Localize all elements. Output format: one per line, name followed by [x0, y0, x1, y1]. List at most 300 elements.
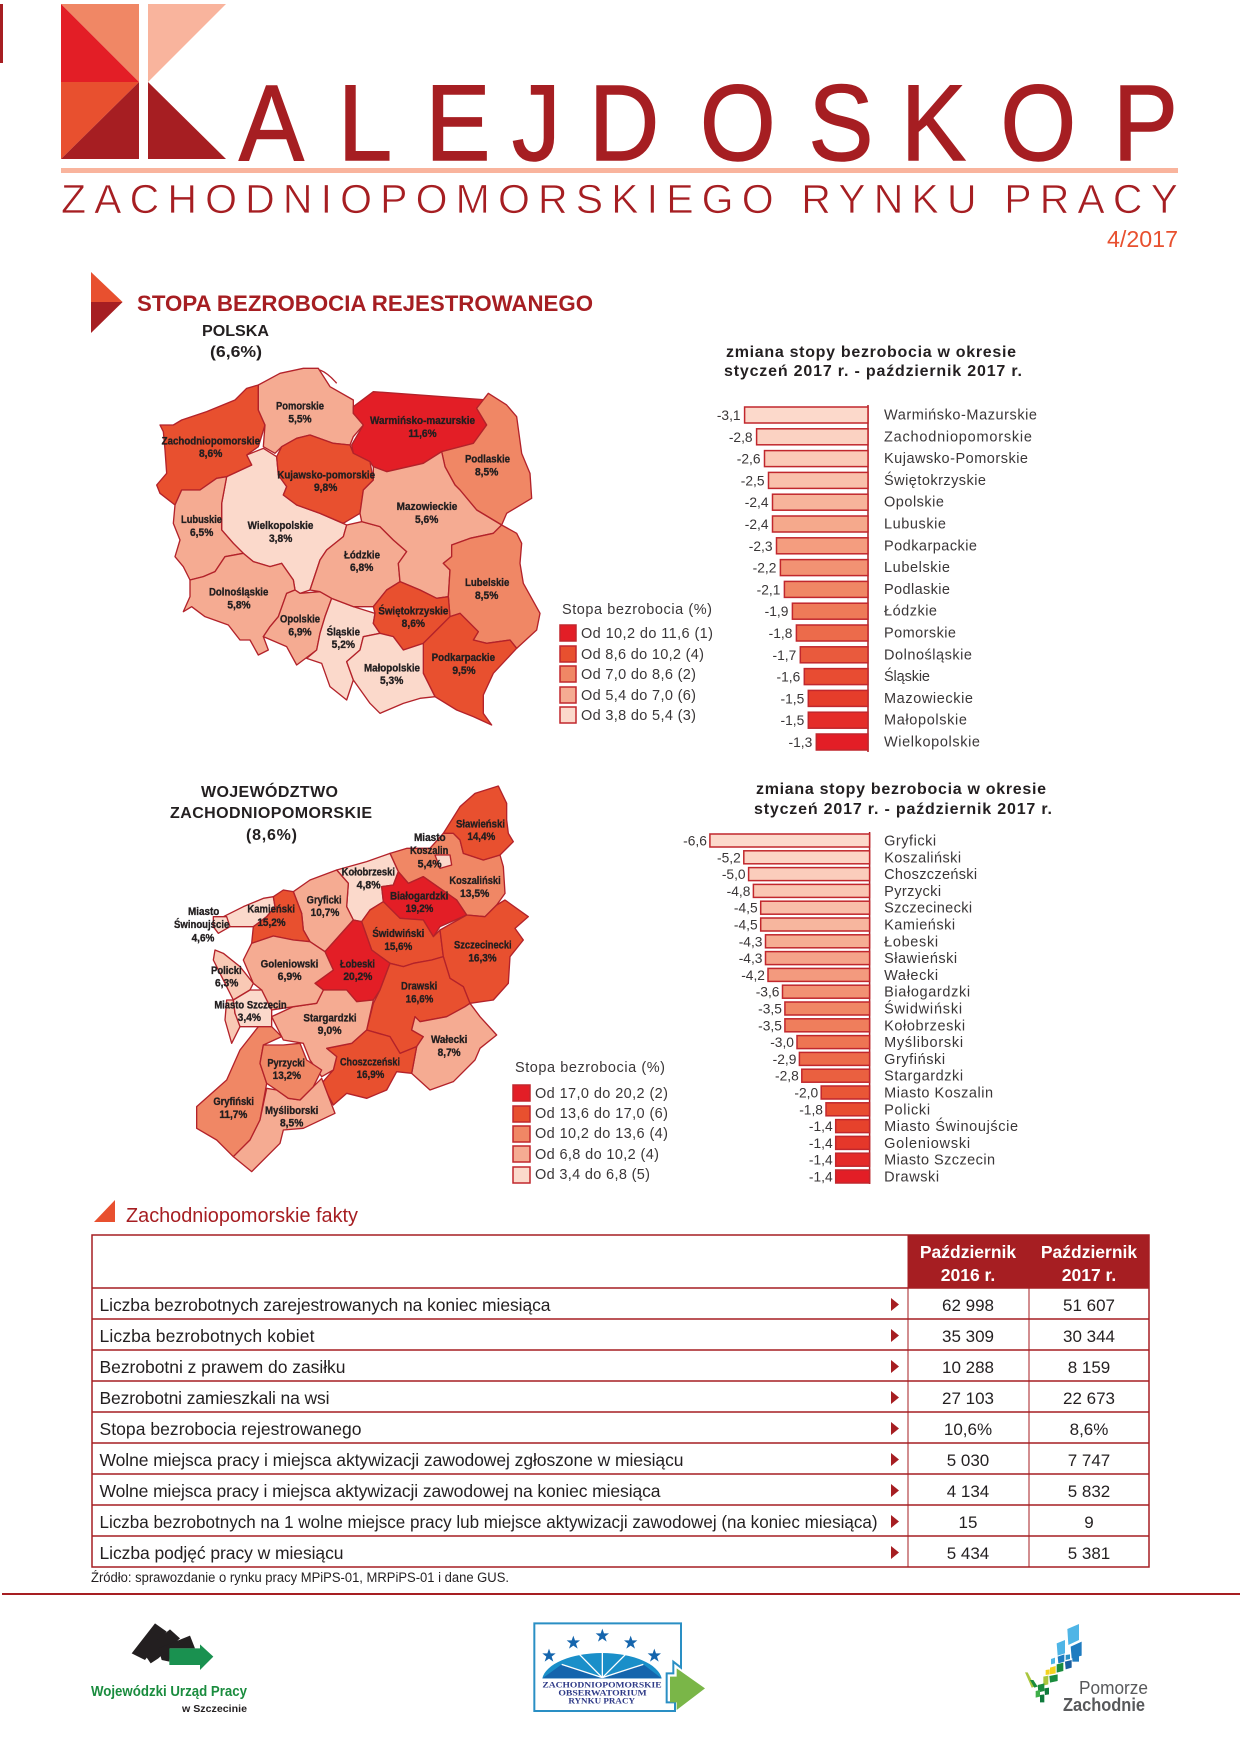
map labels: Miasto — [414, 832, 446, 844]
row: Pomorskie: Pomorskie — [884, 626, 956, 642]
region: Pomorskie — [258, 368, 363, 453]
region: Swietokrzyskie — [373, 582, 450, 650]
map labels: Opolskie — [280, 613, 320, 625]
row: Gryficki: -6,6 — [683, 834, 707, 848]
map labels: Kamieński — [247, 903, 295, 915]
map labels: 11,6% — [408, 428, 437, 440]
map labels: 13,5% — [460, 888, 490, 900]
row: Drawski: -1,4 — [809, 1170, 833, 1184]
logo box — [534, 1623, 681, 1711]
row: Kujawsko-Pomorskie — [737, 451, 1028, 467]
map labels: 16,6% — [406, 993, 434, 1005]
map labels: Lubelskie — [465, 577, 509, 589]
row: Szczecinecki — [734, 901, 972, 917]
facts table — [92, 1235, 1149, 1567]
row: Wielkopolskie: -1,3 — [789, 735, 813, 750]
row: unemployed women: 30 344 — [1063, 1327, 1115, 1346]
row: Swidwinski: Świdwiński — [884, 1000, 962, 1018]
region: Wolin island — [223, 897, 275, 927]
region: Walecki — [412, 1003, 497, 1090]
region: Goleniowski — [243, 936, 333, 1010]
map labels: Miasto Szczecin — [214, 999, 287, 1011]
map labels: Koszalin — [410, 845, 449, 857]
table header cells: 2017 r. — [1062, 1265, 1116, 1285]
row: Walecki: Wałecki — [884, 968, 938, 984]
row: Podkarpackie: -2,3 — [749, 539, 773, 554]
logo: Zachodniopomorskie Obserwatorium Rynku Pracy — [534, 1623, 705, 1711]
map labels: 6,8% — [350, 562, 374, 574]
row: Kujawsko-Pomorskie: Kujawsko-Pomorskie — [884, 451, 1028, 467]
row: Goleniowski: Goleniowski — [884, 1136, 970, 1152]
row: Gryfinski — [773, 1052, 945, 1068]
map labels: 5,3% — [380, 675, 404, 687]
row: benefit eligible — [100, 1357, 1110, 1377]
icon: pixel mosaic tick — [1025, 1624, 1082, 1702]
region: Kamienski — [252, 890, 310, 943]
row: Podkarpackie — [749, 538, 977, 554]
row: Zachodniopomorskie: Zachodniopomorskie — [884, 429, 1032, 445]
region: Dolnoslaskie — [183, 553, 295, 655]
section heading: Stopa bezrobocia rejestrowanego — [91, 272, 593, 333]
row: Slaskie: -1,6 — [777, 670, 801, 685]
row: rural unemployed: Bezrobotni zamieszkali na wsi — [100, 1388, 330, 1408]
row: Choszczenski: -5,0 — [722, 867, 746, 882]
chart heading: Poland change: zmiana stopy bezrobocia w okresie — [726, 344, 1016, 361]
map labels: 9,8% — [314, 482, 338, 494]
map labels: Pyrzycki — [267, 1057, 305, 1069]
map labels: 9,5% — [452, 665, 476, 677]
row: Swidwinski — [758, 1000, 962, 1018]
row: unemployed per vacancy: 9 — [1084, 1513, 1094, 1532]
row: Gryfinski: Gryfiński — [884, 1052, 945, 1068]
row: registered unemployment rate: Stopa bezrobocia rejestrowanego — [100, 1419, 362, 1439]
map labels: 15,6% — [384, 941, 413, 953]
map labels: 4,6% — [192, 932, 215, 944]
map labels: Wielkopolskie — [248, 520, 313, 532]
logo: Pomorze Zachodnie: Zachodnie — [1063, 1695, 1145, 1715]
map labels: Śląskie — [327, 625, 360, 638]
row: unemployed women: Liczba bezrobotnych kobiet — [100, 1326, 315, 1346]
map labels: 3,8% — [269, 533, 293, 545]
legend: Poland unemployment rate: Od 8,6 do 10,2 (4) — [581, 647, 704, 663]
legend: county unemployment rate — [513, 1060, 668, 1183]
map labels: Stargardzki — [303, 1012, 357, 1024]
legend: Poland unemployment rate — [560, 602, 713, 724]
row: vacancies at month end: 4 134 — [947, 1482, 989, 1501]
map labels: 16,3% — [468, 952, 497, 964]
row: Kolobrzeski — [758, 1018, 965, 1034]
row: Swietokrzyskie: Świętokrzyskie — [884, 471, 986, 489]
region: Kujawsko-pomorskie — [277, 435, 373, 523]
map labels: 10,7% — [311, 907, 340, 919]
row: Dolnoslaskie — [773, 647, 972, 663]
table header cells: 2016 r. — [941, 1265, 995, 1285]
map labels: Koszaliński — [449, 875, 501, 887]
icon: kaleidoscope K logo — [61, 4, 226, 159]
row: benefit eligible: Bezrobotni z prawem do zasiłku — [100, 1357, 346, 1377]
map labels: Małopolskie — [364, 662, 420, 674]
map heading: Wojewodztwo Zachodniopomorskie — [170, 782, 372, 844]
axis — [869, 832, 871, 1184]
region: Podlaskie — [442, 393, 532, 525]
map labels: Białogardzki — [390, 890, 448, 902]
row: Mysliborski — [770, 1035, 963, 1051]
row: Mazowieckie: -1,5 — [781, 691, 805, 706]
region: Lubuskie — [173, 477, 243, 580]
region: Stargardzki — [272, 990, 373, 1077]
row: Kujawsko-Pomorskie: -2,6 — [737, 452, 761, 467]
chart heading: county change: zmiana stopy bezrobocia w okresie — [756, 781, 1046, 798]
legend: Poland unemployment rate: Od 7,0 do 8,6 (2) — [581, 667, 696, 683]
map labels: 8,5% — [280, 1118, 304, 1130]
map labels: Drawski — [401, 980, 437, 992]
row: Policki: Policki — [884, 1102, 930, 1118]
row: jobs taken: 5 434 — [947, 1544, 989, 1563]
row: Lubelskie: Lubelskie — [884, 560, 950, 576]
region: Lobeski — [315, 920, 390, 1002]
row: Malopolskie: -1,5 — [781, 713, 805, 728]
row: Mysliborski: -3,0 — [770, 1035, 794, 1050]
map labels: Myśliborski — [265, 1105, 318, 1117]
row: Wielkopolskie — [789, 734, 980, 750]
region: Policki — [213, 950, 253, 1000]
heading text: STOPA BEZROBOCIA REJESTROWANEGO — [137, 291, 593, 316]
row: Stargardzki: -2,8 — [775, 1069, 799, 1084]
row: Slaskie: Śląskie — [884, 667, 930, 685]
map labels: 9,0% — [318, 1025, 342, 1037]
logo text: RYNKU PRACY — [568, 1696, 635, 1705]
row: unemployed women: 35 309 — [942, 1327, 994, 1346]
map labels: 16,9% — [357, 1069, 385, 1081]
row: Miasto Swinoujscie: -1,4 — [809, 1119, 833, 1134]
logo text — [542, 1681, 662, 1705]
map labels: 13,2% — [273, 1070, 301, 1082]
map labels: Policki — [211, 965, 242, 977]
row: vacancies at month end: Wolne miejsca pracy i miejsca aktywizacji zawodowej na koniec miesiąca — [100, 1481, 661, 1501]
logo: Pomorze Zachodnie — [1025, 1624, 1148, 1715]
table header cells: Październik — [1041, 1242, 1137, 1262]
row: Miasto Swinoujscie: Miasto Świnoujście — [884, 1117, 1018, 1135]
map heading: Polska: (6,6%) — [210, 344, 262, 361]
map labels: 6,9% — [278, 971, 302, 983]
icon: green arrow — [670, 1668, 705, 1710]
region: Lodzkie — [310, 522, 407, 607]
region: Drawski — [367, 957, 470, 1053]
row: Bialogardzki: Białogardzki — [884, 985, 970, 1001]
row: Lubelskie — [753, 560, 950, 576]
row: Dolnoslaskie: -1,7 — [773, 648, 796, 663]
legend: county unemployment rate: Od 6,8 do 10,2 (4) — [535, 1147, 659, 1163]
row: Lubelskie: -2,2 — [753, 561, 776, 576]
row: Mazowieckie — [781, 690, 973, 707]
map labels: 8,7% — [438, 1047, 461, 1059]
icon: dome — [542, 1650, 662, 1678]
row: Warminsko-Mazurskie — [717, 407, 1037, 424]
table grid — [92, 1235, 1149, 1567]
row: Drawski: Drawski — [884, 1170, 939, 1186]
row: jobs taken — [100, 1543, 1110, 1563]
region: Bialogardzki — [382, 872, 467, 937]
row: Pyrzycki — [727, 884, 941, 900]
map labels: 5,5% — [288, 413, 312, 425]
row: Koszalinski: Koszaliński — [884, 850, 961, 866]
map labels: 6,5% — [190, 527, 214, 539]
map labels: Warmińsko-mazurskie — [370, 415, 475, 427]
row: Goleniowski — [809, 1136, 970, 1152]
row: unemployed per vacancy: Liczba bezrobotnych na 1 wolne miejsce pracy lub miejsce aktywizacji zawodowej (na koniec miesiąca) — [100, 1512, 878, 1532]
map labels: Wałecki — [431, 1034, 467, 1046]
map labels: Szczecinecki — [454, 939, 512, 951]
region: Koszalinski — [390, 833, 505, 917]
row: Mazowieckie: Mazowieckie — [884, 691, 973, 707]
map labels: 15,2% — [257, 917, 286, 929]
region: Zachodniopomorskie — [157, 385, 265, 505]
region: Wielkopolskie — [222, 448, 347, 593]
row: jobs taken: 5 381 — [1068, 1544, 1110, 1563]
row: Stargardzki — [775, 1069, 963, 1085]
map labels: Gryfiński — [213, 1096, 254, 1108]
map labels: Sławieński — [456, 818, 505, 830]
row: Szczecinecki: Szczecinecki — [884, 901, 972, 917]
row: Lodzkie — [765, 603, 937, 620]
footer rule — [2, 1593, 1240, 1595]
legend: Poland unemployment rate: Od 10,2 do 11,6 (1) — [581, 626, 713, 642]
region: Choszczenski — [322, 1030, 417, 1105]
row: Pyrzycki: Pyrzycki — [884, 884, 941, 900]
row: Miasto Szczecin: -1,4 — [809, 1153, 833, 1168]
row: Miasto Koszalin — [794, 1086, 993, 1102]
region: Opolskie — [263, 590, 332, 665]
map regions — [197, 786, 528, 1172]
row: Swidwinski: -3,5 — [758, 1002, 782, 1016]
row: Lubuskie — [745, 516, 946, 532]
row: rural unemployed: 27 103 — [942, 1389, 994, 1408]
source note: Źródło: sprawozdanie o rynku pracy MPiPS-01, MRPiPS-01 i dane GUS. — [91, 1570, 509, 1585]
region: Kolobrzeski — [337, 853, 398, 922]
map labels: 5,6% — [415, 514, 439, 526]
map labels: Świdwiński — [372, 927, 424, 940]
map labels — [162, 400, 510, 687]
region: Miasto Szczecin — [233, 990, 272, 1027]
map labels: Choszczeński — [340, 1056, 400, 1068]
chart heading: county change — [754, 781, 1052, 818]
icon: mountains and green arrow — [132, 1623, 213, 1670]
row: Slaskie — [777, 667, 930, 685]
row: benefit eligible: 8 159 — [1068, 1358, 1110, 1377]
row: Drawski — [809, 1170, 939, 1186]
row: Slawienski — [739, 951, 957, 967]
row: Kamienski: Kamieński — [884, 918, 955, 934]
row: Choszczenski — [722, 867, 977, 883]
row: Podlaskie: -2,1 — [757, 582, 780, 597]
row: Bialogardzki — [756, 985, 970, 1001]
legend: county unemployment rate: Od 17,0 do 20,2 (2) — [535, 1086, 668, 1102]
bar chart: change in unemployment by county — [683, 832, 1018, 1186]
map labels: Łobeski — [340, 958, 375, 970]
row: vacancies at month end — [100, 1481, 1110, 1501]
map labels: 20,2% — [343, 971, 373, 983]
row: Malopolskie: Małopolskie — [884, 713, 967, 729]
chart heading: Poland change: styczeń 2017 r. - październik 2017 r. — [724, 363, 1022, 380]
map labels: 5,4% — [418, 858, 442, 870]
issue number: 4/2017 — [1107, 226, 1178, 252]
row: Policki: -1,8 — [799, 1102, 823, 1117]
row: Gryficki — [683, 834, 936, 850]
region: Malopolskie — [347, 633, 435, 713]
legend: county unemployment rate: Stopa bezrobocia (%) — [515, 1060, 665, 1076]
row: Koszalinski — [717, 850, 961, 866]
row: vacancies reported: 5 030 — [947, 1451, 989, 1470]
subtitle: ZACHODNIOPOMORSKIEGO RYNKU PRACY — [61, 176, 1178, 222]
row: Lubuskie: -2,4 — [745, 517, 769, 532]
row: Miasto Szczecin: Miasto Szczecin — [884, 1153, 995, 1169]
row: Slawienski: Sławieński — [884, 951, 957, 967]
map labels: Gryficki — [307, 894, 342, 906]
region: Mazowieckie — [360, 452, 502, 598]
facts heading text: Zachodniopomorskie fakty — [126, 1205, 358, 1227]
region: Warminsko-mazurskie — [352, 392, 488, 472]
map heading: Polska — [202, 323, 269, 361]
row: Malopolskie — [781, 712, 967, 729]
masthead: Kalejdoskop logo and title — [0, 4, 1178, 252]
map labels: Lubuskie — [181, 514, 222, 526]
legend: county unemployment rate: Od 13,6 do 17,0 (6) — [535, 1106, 668, 1122]
map: Poland voivodeships — [157, 368, 540, 725]
region: Slaskie — [307, 598, 380, 700]
legend: county unemployment rate: Od 3,4 do 6,8 (5) — [535, 1167, 650, 1183]
map labels: 6,9% — [288, 626, 312, 638]
row: Opolskie: -2,4 — [745, 495, 769, 510]
region: Slawienski — [443, 786, 513, 860]
region: Miasto Koszalin — [435, 855, 452, 868]
row: Bialogardzki: -3,6 — [756, 985, 780, 1000]
map regions — [157, 368, 540, 725]
row: Pyrzycki: -4,8 — [727, 884, 751, 899]
row: Podlaskie: Podlaskie — [884, 582, 950, 598]
map labels: 3,4% — [238, 1012, 261, 1024]
row: Lubuskie: Lubuskie — [884, 516, 946, 532]
row: Goleniowski: -1,4 — [809, 1136, 833, 1151]
map labels: Dolnośląskie — [209, 586, 268, 598]
bar chart: change in unemployment by voivodeship — [717, 405, 1037, 752]
row: Lodzkie: Łódzkie — [884, 604, 937, 620]
row: Warminsko-Mazurskie: Warmińsko-Mazurskie — [884, 408, 1037, 424]
facts heading: Zachodniopomorskie fakty — [94, 1200, 358, 1227]
row: Dolnoslaskie: Dolnośląskie — [884, 647, 972, 663]
map labels: Zachodniopomorskie — [162, 435, 260, 447]
logo text: Pomorze — [1079, 1678, 1148, 1698]
region: Gryfinski — [197, 1027, 282, 1157]
row: Opolskie: Opolskie — [884, 495, 944, 511]
edge mark — [0, 4, 3, 63]
map labels: Świnoujście — [174, 918, 229, 931]
region: Lubelskie — [443, 525, 540, 648]
map labels: Goleniowski — [261, 958, 318, 970]
map labels: Miasto — [188, 906, 220, 918]
row: Kamienski: -4,5 — [734, 918, 758, 932]
row: Swietokrzyskie: -2,5 — [741, 473, 765, 488]
icon: corner triangle — [94, 1200, 115, 1222]
row: Kolobrzeski: -3,5 — [758, 1018, 782, 1033]
row: vacancies at month end: 5 832 — [1068, 1482, 1110, 1501]
row: unemployed women — [100, 1326, 1115, 1346]
table header cells — [908, 1235, 1149, 1288]
logo text: OBSERWATORIUM — [558, 1688, 647, 1697]
row: registered unemployment rate: 10,6% — [944, 1420, 992, 1439]
title: Kalejdoskop: ALEJDOSKOP — [239, 62, 1178, 183]
row: jobs taken: Liczba podjęć pracy w miesiącu — [100, 1543, 344, 1563]
axis — [867, 405, 869, 752]
region: Miasto Swinoujscie — [213, 917, 230, 933]
map labels: Świętokrzyskie — [378, 604, 448, 617]
map labels: 8,6% — [199, 448, 223, 460]
row: registered unemployment rate: 8,6% — [1070, 1420, 1108, 1439]
row: Gryfinski: -2,9 — [773, 1052, 797, 1067]
row: Lodzkie: -1,9 — [765, 604, 789, 619]
row: Walecki: -4,2 — [741, 968, 765, 983]
row: Gryficki: Gryficki — [884, 834, 936, 850]
logo: Wojewodzki Urzad Pracy: w Szczecinie — [181, 1703, 247, 1715]
row: registered unemployed: 51 607 — [1063, 1296, 1115, 1315]
row: Kolobrzeski: Kołobrzeski — [884, 1018, 965, 1034]
legend: Poland unemployment rate: Stopa bezrobocia (%) — [562, 602, 712, 618]
map labels: Łódzkie — [344, 549, 380, 561]
map labels: 8,5% — [475, 590, 499, 602]
map labels: Podkarpackie — [432, 652, 495, 664]
row: Choszczenski: Choszczeński — [884, 867, 977, 883]
icon: stars — [542, 1629, 661, 1662]
map labels: Mazowieckie — [397, 501, 457, 513]
legend: Poland unemployment rate: Od 5,4 do 7,0 (6) — [581, 688, 696, 704]
map labels: Kujawsko-pomorskie — [277, 469, 375, 481]
row: Podlaskie — [757, 581, 950, 598]
chart heading: Poland change — [724, 344, 1022, 380]
map labels: 6,3% — [215, 978, 239, 990]
map heading: Wojewodztwo Zachodniopomorskie: WOJEWÓDZTWO — [201, 782, 338, 801]
row: Zachodniopomorskie — [729, 429, 1032, 445]
region: Szczecinecki — [440, 900, 528, 1003]
map labels: 11,7% — [219, 1109, 248, 1121]
logo: Wojewodzki Urzad Pracy — [91, 1623, 248, 1715]
icon: section arrow — [91, 272, 123, 333]
row: Mysliborski: Myśliborski — [884, 1035, 963, 1051]
legend: Poland unemployment rate: Od 3,8 do 5,4 (3) — [581, 708, 696, 724]
map labels: 8,5% — [475, 466, 499, 478]
region: Swidwinski — [362, 902, 443, 967]
legend: county unemployment rate: Od 10,2 do 13,6 (4) — [535, 1126, 668, 1142]
row: Walecki — [741, 968, 938, 984]
row: Wielkopolskie: Wielkopolskie — [884, 734, 980, 750]
row: Koszalinski: -5,2 — [717, 850, 741, 865]
row: Policki — [799, 1102, 930, 1118]
row: Pomorskie: -1,8 — [769, 626, 793, 641]
row: vacancies reported: 7 747 — [1068, 1451, 1110, 1470]
row: registered unemployed — [100, 1295, 1115, 1315]
map labels: Kołobrzeski — [342, 867, 395, 879]
row: Opolskie — [745, 494, 944, 511]
map labels: 8,6% — [402, 618, 425, 630]
map labels: 5,8% — [227, 599, 251, 611]
table header cells: Październik — [920, 1242, 1016, 1262]
map labels: 14,4% — [467, 831, 496, 843]
region: Pyrzycki — [260, 1043, 322, 1100]
map: West Pomeranian counties — [174, 786, 528, 1172]
row: Slawienski: -4,3 — [739, 951, 763, 966]
map heading: Wojewodztwo Zachodniopomorskie: ZACHODNIOPOMORSKIE — [170, 805, 372, 822]
row: rural unemployed — [100, 1388, 1115, 1408]
row: Miasto Koszalin: -2,0 — [794, 1086, 819, 1100]
row: benefit eligible: 10 288 — [942, 1358, 994, 1377]
